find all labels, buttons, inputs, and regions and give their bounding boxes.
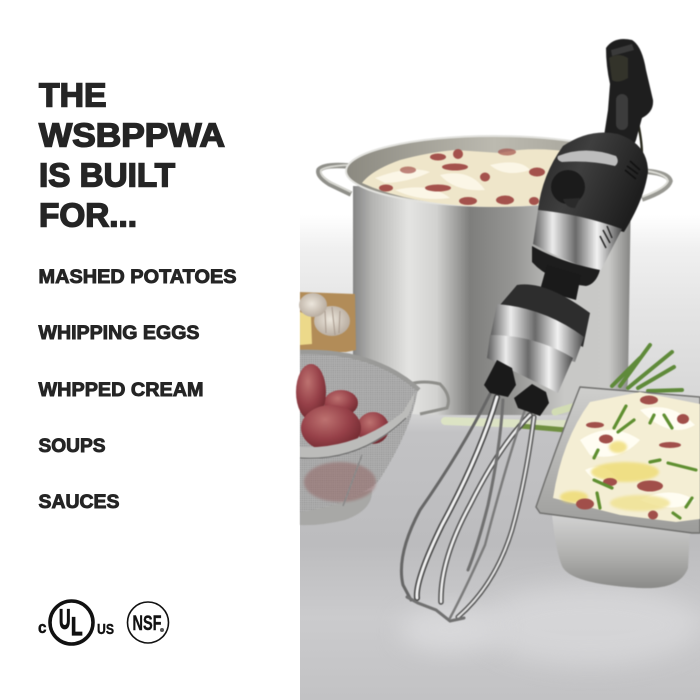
use: whipped cream: WHPPED CREAM <box>38 379 204 401</box>
icon: cULus certification mark: U <box>59 604 70 634</box>
title <box>39 78 225 234</box>
panel: product photo scene <box>296 0 700 700</box>
motor housing <box>538 132 648 232</box>
green onions <box>445 345 682 430</box>
power button <box>551 170 585 204</box>
icon: cULus certification mark: US <box>97 621 114 638</box>
icon: NSF certification mark <box>128 602 168 643</box>
pot body <box>353 186 631 415</box>
whisk sockets <box>484 360 516 397</box>
shaft coupling <box>500 284 590 347</box>
vent slots <box>625 161 640 179</box>
chrome shaft base <box>490 304 584 362</box>
pot handles <box>319 166 351 194</box>
colander with potatoes <box>296 352 448 525</box>
neck <box>532 246 600 286</box>
use: soups: SOUPS <box>38 435 106 457</box>
list of uses <box>38 266 236 513</box>
icon: cULus certification mark <box>38 601 114 644</box>
panel: white text column <box>0 0 300 700</box>
steam pan of mashed potatoes <box>536 387 700 588</box>
icon: NSF certification mark: NSF <box>132 612 162 635</box>
counter and backdrop <box>300 0 700 700</box>
stock pot <box>319 136 670 415</box>
use: whipping eggs: WHIPPING EGGS <box>38 322 200 344</box>
icon: cULus certification mark: c <box>38 618 46 637</box>
use: mashed potatoes: MASHED POTATOES <box>38 266 236 288</box>
title: THE <box>39 78 106 114</box>
title: IS BUILT <box>39 158 176 194</box>
title: FOR... <box>39 198 137 234</box>
use: sauces: SAUCES <box>38 491 120 513</box>
pot inner wall and rim <box>346 136 642 206</box>
whisk attachment <box>401 394 534 621</box>
cutting board with garlic and butter <box>299 292 356 352</box>
mashed potatoes in pot <box>362 148 572 207</box>
title: WSBPPWA <box>39 118 225 154</box>
chrome collar <box>533 210 622 272</box>
icon: cULus certification mark: L <box>71 613 82 641</box>
nameplate <box>558 150 618 166</box>
immersion mixer <box>484 39 653 416</box>
power cord and handle <box>637 118 642 162</box>
